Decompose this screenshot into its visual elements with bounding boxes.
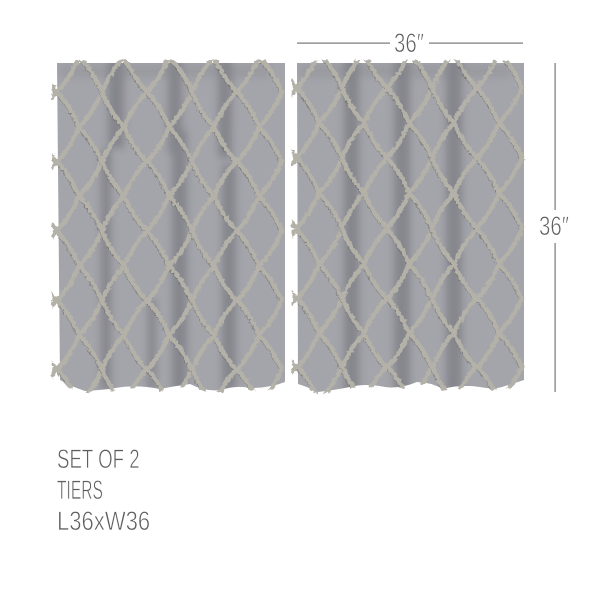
left curtain folds <box>60 58 270 390</box>
width line left <box>297 42 390 44</box>
product type: TIERS <box>57 475 103 505</box>
width line right <box>429 42 523 44</box>
right curtain lattice pattern <box>290 59 526 394</box>
height line top <box>554 63 556 210</box>
product details text <box>57 444 150 537</box>
set count: SET OF 2 <box>57 444 140 474</box>
right curtain fabric <box>297 63 524 392</box>
left curtain fabric <box>57 63 285 391</box>
height label: 36″ <box>539 211 569 242</box>
panel: left curtain <box>50 59 286 394</box>
height line bottom <box>554 243 556 392</box>
right curtain folds <box>300 58 510 393</box>
size: L36xW36 <box>57 507 150 537</box>
panel: right curtain <box>290 59 526 394</box>
left curtain lattice pattern <box>50 59 286 394</box>
width label: 36″ <box>394 28 424 59</box>
